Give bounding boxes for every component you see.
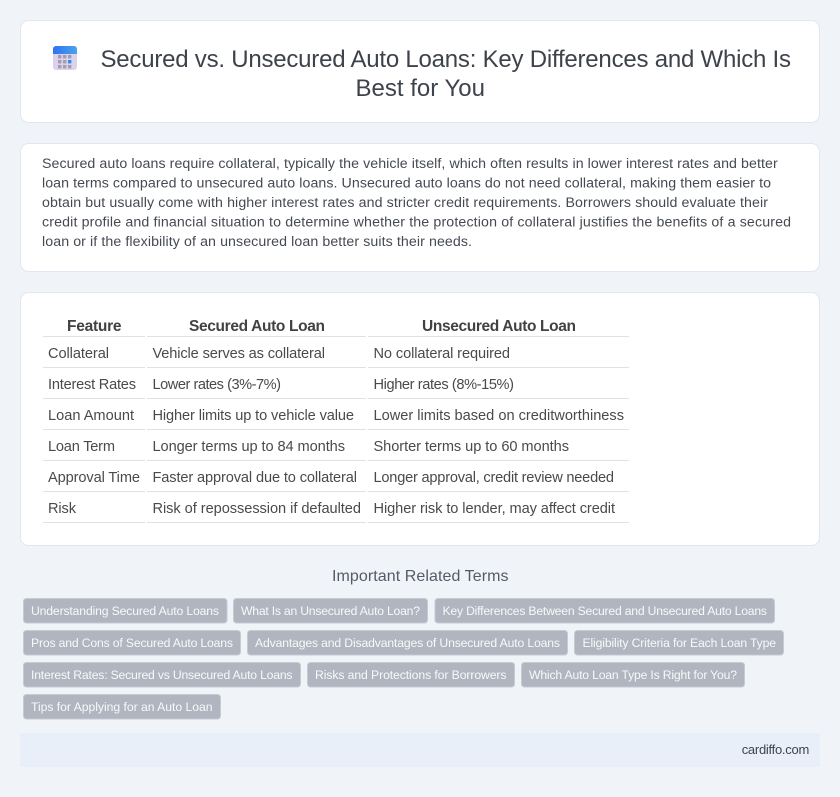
summary text: credit profile and financial situation to determine whether the protection of collateral justifies the benefits of a secured [42,214,791,230]
summary text [42,156,791,250]
title: Best for You [356,75,485,102]
tag group: related terms [24,598,784,719]
panel: header [20,20,820,122]
tag [435,598,774,623]
row: loan amount [48,408,624,424]
row: risk: Higher risk to lender, may affect credit [374,501,615,517]
tag: What Is an Unsecured Auto Loan? [241,604,420,618]
summary text: loan or if the flexibility of an unsecured loan better suits their needs. [42,234,472,250]
row: loan term: Loan Term [48,439,115,455]
row: collateral: Vehicle serves as collateral [152,346,325,362]
row: interest rates [48,377,514,393]
summary text: Secured auto loans require collateral, typically the vehicle itself, which often results in lower interest rates and better [42,156,778,172]
tag: Risks and Protections for Borrowers [315,668,506,682]
panel: comparison table [20,292,820,546]
summary text: loan terms compared to unsecured auto loans. Unsecured auto loans do not need collateral, making them easier to [42,176,771,192]
table header row: Feature [67,318,122,335]
row: interest rates: Higher rates (8%-15%) [374,377,514,393]
row: loan amount: Higher limits up to vehicle value [152,408,354,424]
tag: Key Differences Between Secured and Unsecured Auto Loans [442,604,767,618]
table header row: Unsecured Auto Loan [422,318,576,335]
footer [20,733,820,767]
tag [308,662,514,687]
tag [248,630,568,655]
row: loan term: Longer terms up to 84 months [152,439,345,455]
title [100,46,791,102]
row: loan term [48,439,569,455]
tag: Which Auto Loan Type Is Right for You? [529,668,737,682]
tag: Tips for Applying for an Auto Loan [31,700,212,714]
tag: Pros and Cons of Secured Auto Loans [31,636,233,650]
table header row [67,318,576,335]
tag: Advantages and Disadvantages of Unsecured Auto Loans [255,636,560,650]
row: risk [48,501,615,517]
row: interest rates: Interest Rates [48,377,136,393]
tag [522,662,744,687]
tag: Understanding Secured Auto Loans [31,604,219,618]
table header row: Secured Auto Loan [189,318,325,335]
tag [24,662,300,687]
title: Secured vs. Unsecured Auto Loans: Key Differences and Which Is [100,46,791,73]
row: collateral [48,346,510,362]
row: approval time: Longer approval, credit review needed [374,470,614,486]
panel: summary paragraph [20,144,820,272]
tag [24,630,240,655]
heading: important related terms: Important Related Terms [332,568,508,585]
footer source text: cardiffo.com [742,742,809,757]
tag [234,598,428,623]
row: approval time: Approval Time [48,470,140,486]
row: approval time [48,470,614,486]
row: loan term: Shorter terms up to 60 months [374,439,569,455]
row: approval time: Faster approval due to collateral [152,470,357,486]
tag: Interest Rates: Secured vs Unsecured Auto Loans [31,668,292,682]
row: collateral: Collateral [48,346,109,362]
tag [24,598,227,623]
row: collateral: No collateral required [374,346,510,362]
summary text: obtain but usually come with higher interest rates and stricter credit requirements. Borrowers should evaluate their [42,195,768,211]
row: loan amount: Lower limits based on creditworthiness [374,408,624,424]
row: risk: Risk of repossession if defaulted [152,501,361,517]
row: loan amount: Loan Amount [48,408,134,424]
tag: Eligibility Criteria for Each Loan Type [582,636,776,650]
row: interest rates: Lower rates (3%-7%) [152,377,281,393]
tag [574,630,784,655]
icon: calendar [53,46,77,70]
tag [24,694,220,719]
row: risk: Risk [48,501,77,517]
